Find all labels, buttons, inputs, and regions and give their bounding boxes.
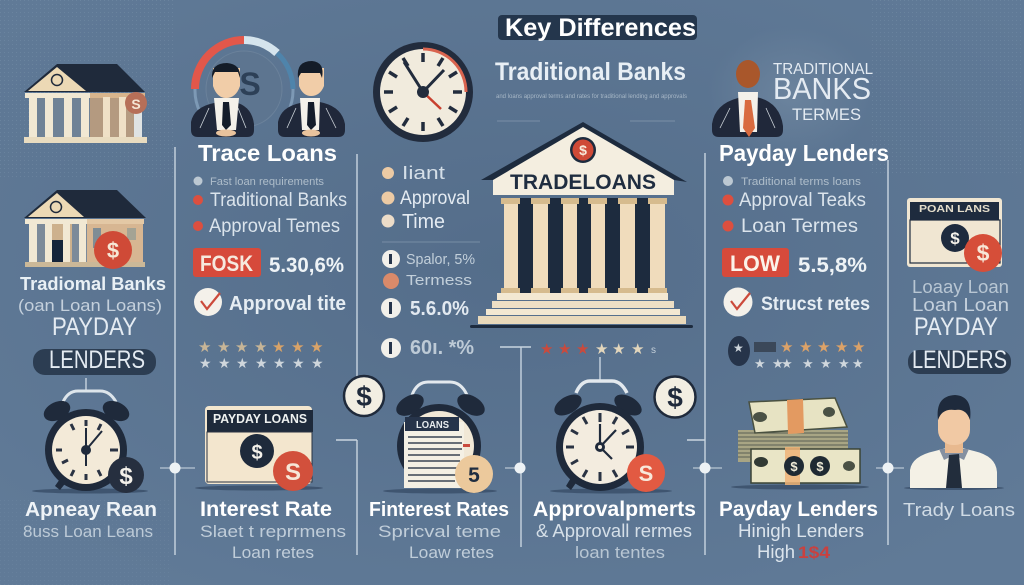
columns bbox=[501, 198, 667, 293]
list: bank approval time: Approval bbox=[400, 188, 470, 209]
text block: left bank caption: (oan Loan Loans) bbox=[18, 296, 162, 315]
rating stars: payday lenders: ★ bbox=[733, 341, 744, 355]
icon: alarm clock with loan document bbox=[383, 382, 497, 494]
icon: stack of cash: $ bbox=[816, 459, 824, 474]
caption: finterest rates: Finterest Rates bbox=[369, 499, 509, 521]
timeline node: fourth divider bbox=[882, 462, 894, 474]
icon: alarm clock with red coin bbox=[550, 381, 672, 494]
list: bank approval time: Iiant bbox=[402, 163, 445, 183]
list: trace loans features: Traditional Banks bbox=[210, 190, 347, 211]
caption: apneay rean: Apneay Rean bbox=[25, 499, 157, 521]
list: payday features: Approval Teaks bbox=[739, 190, 866, 211]
icon: payday loans card bbox=[195, 406, 323, 491]
icon: dollar coin right bbox=[654, 376, 696, 418]
icon: dollar coin left bbox=[344, 376, 384, 416]
text block: traditional banks termes: BANKS bbox=[773, 71, 871, 106]
timeline node: center divider bbox=[514, 462, 526, 474]
icon: alarm clock with loan document: 5 bbox=[468, 464, 480, 487]
caption: finterest rates: Loaw retes bbox=[409, 543, 494, 562]
icon: payday loans card: $ bbox=[251, 442, 263, 464]
icon: person with tie bbox=[904, 395, 1004, 490]
list: payday features bbox=[722, 176, 866, 237]
rating stars: trace loans bbox=[198, 338, 324, 372]
badge: fosk rate: 5.30,6% bbox=[269, 254, 344, 277]
rating stars: center: ★★★ ★★★ bbox=[540, 340, 644, 358]
rating stars: payday lenders bbox=[728, 336, 865, 372]
heading: payday lenders: Payday Lenders bbox=[719, 140, 889, 166]
list: bank rates: Termess bbox=[406, 272, 472, 289]
rating stars: payday lenders: ★★★★★ bbox=[780, 338, 865, 356]
icon: central bank building: TRADELOANS bbox=[510, 171, 656, 194]
badge: low rate bbox=[722, 248, 867, 277]
caption: approval terms: loan tentes bbox=[575, 543, 665, 562]
icon: small bank top left: S bbox=[131, 96, 141, 112]
icon: alarm clock with dollar: $ bbox=[119, 463, 133, 490]
text block: left bank caption: Tradiomal Banks bbox=[20, 274, 166, 294]
caption: approval terms: Approvalpmerts bbox=[533, 498, 696, 521]
rating stars: trace loans: ★★★★★★★ bbox=[199, 356, 324, 372]
caption: finterest rates: Spricval teme bbox=[378, 522, 501, 541]
caption: interest rate: Loan retes bbox=[232, 543, 314, 562]
badge: payday lenders left bbox=[33, 313, 156, 375]
icon: loan card right: $ bbox=[950, 229, 960, 248]
list: trace loans features: Fast loan requirements bbox=[210, 176, 325, 188]
text block: right loan caption: Loan Loan bbox=[912, 295, 1009, 315]
rating stars: center: s bbox=[651, 345, 656, 356]
badge: payday lenders right bbox=[908, 313, 1011, 374]
icon: stack of cash: $ bbox=[790, 459, 798, 474]
icon: loan card right: $ bbox=[977, 240, 990, 266]
caption: finterest rates bbox=[369, 499, 509, 562]
list: bank rates bbox=[381, 250, 475, 359]
list: trace loans features bbox=[193, 176, 347, 237]
icon: loan card right bbox=[907, 198, 1002, 272]
icon: central bank building bbox=[470, 122, 693, 328]
check item: strict rates: Strucst retes bbox=[761, 294, 870, 315]
caption: payday lenders: Hinigh Lenders bbox=[738, 521, 864, 541]
check item: approval time bbox=[194, 288, 346, 316]
icon: central bank building: $ bbox=[579, 142, 587, 158]
caption: trady loans: Trady Loans bbox=[903, 500, 1015, 520]
badge: payday lenders left: PAYDAY bbox=[52, 313, 137, 341]
icon: gauge with two businessmen: S bbox=[239, 66, 261, 102]
rating stars: trace loans: ★★★★ ★★★ bbox=[198, 338, 323, 356]
fine print under heading: and loans approval terms and rates for traditional lending and approvals bbox=[496, 94, 687, 100]
badge: low rate: LOW bbox=[730, 251, 780, 276]
title: key differences: Key Differences bbox=[505, 14, 696, 42]
icon: alarm clock with loan document: LOANS bbox=[416, 420, 449, 431]
icon: alarm clock with red coin: S bbox=[639, 461, 653, 486]
steps bbox=[470, 293, 693, 328]
caption: apneay rean bbox=[23, 499, 157, 541]
caption: payday lenders: High bbox=[757, 542, 795, 562]
icon: loan card right: POAN LANS bbox=[919, 204, 990, 215]
icon: dollar coin left: $ bbox=[356, 381, 372, 412]
icon: businessman right bbox=[278, 61, 345, 137]
badge: payday lenders left: LENDERS bbox=[49, 346, 145, 374]
rating stars: payday lenders: ★★★★★★★ bbox=[754, 357, 864, 372]
timeline node: third divider bbox=[700, 462, 710, 474]
caption: approval terms: & Approvall rermes bbox=[536, 521, 692, 541]
list: payday features: Traditional terms loans bbox=[741, 176, 862, 188]
list: bank rates: 5.6.0% bbox=[410, 298, 469, 320]
list: payday features: Loan Termes bbox=[741, 216, 858, 237]
list: bank rates: 60ı. *% bbox=[410, 337, 474, 359]
heading: traditional banks: Traditional Banks bbox=[495, 58, 686, 86]
caption: apneay rean: 8uss Loan Leans bbox=[23, 522, 153, 541]
badge: fosk rate bbox=[193, 248, 344, 277]
icon: payday loans card: S bbox=[285, 459, 301, 486]
list: trace loans features: Approval Temes bbox=[209, 216, 340, 237]
icon: stack of cash bbox=[731, 398, 869, 490]
text block: left bank caption bbox=[18, 274, 166, 315]
text block: traditional banks termes: TRADITIONAL bbox=[773, 61, 873, 78]
text block: right loan caption bbox=[912, 277, 1009, 315]
icon: businessman with orange tie bbox=[708, 27, 872, 163]
list: bank approval time bbox=[382, 163, 470, 233]
badge: low rate: 5.5,8% bbox=[798, 254, 867, 277]
icon: alarm clock with dollar bbox=[32, 391, 148, 494]
caption: interest rate bbox=[200, 498, 346, 562]
caption: payday lenders: Payday Lenders bbox=[719, 498, 878, 521]
icon: payday loans card: PAYDAY LOANS bbox=[213, 411, 307, 426]
panel: payday lenders column bbox=[719, 140, 889, 372]
icon: bank with dollar coin: $ bbox=[107, 238, 119, 263]
text block: traditional banks termes bbox=[773, 61, 873, 124]
badge: payday lenders right: PAYDAY bbox=[914, 313, 998, 341]
caption: payday lenders: 1$4 bbox=[798, 543, 831, 562]
heading: trace loans: Trace Loans bbox=[198, 140, 337, 166]
icon: small bank top left bbox=[24, 64, 147, 143]
icon: businessman left bbox=[191, 63, 254, 137]
check item: strict rates bbox=[724, 288, 870, 316]
caption: approval terms bbox=[533, 498, 696, 562]
panel: trace loans column bbox=[193, 140, 347, 372]
caption: payday lenders bbox=[719, 498, 878, 562]
icon: gauge with two businessmen bbox=[191, 40, 345, 137]
timeline node: first divider bbox=[170, 462, 180, 474]
icon: bank with dollar coin bbox=[24, 190, 146, 269]
check item: approval time: Approval tite bbox=[229, 293, 346, 315]
icon: dollar coin right: $ bbox=[667, 382, 683, 413]
badge: fosk rate: FOSK bbox=[200, 251, 253, 276]
icon: wall clock bbox=[373, 42, 473, 142]
caption: interest rate: Slaet t reprrmens bbox=[200, 522, 346, 541]
list: bank approval time: Time bbox=[402, 211, 445, 233]
text block: traditional banks termes: TERMES bbox=[792, 105, 861, 124]
text block: right loan caption: Loaay Loan bbox=[912, 277, 1009, 297]
caption: interest rate: Interest Rate bbox=[200, 498, 332, 521]
list: bank rates: Spalor, 5% bbox=[406, 251, 475, 268]
